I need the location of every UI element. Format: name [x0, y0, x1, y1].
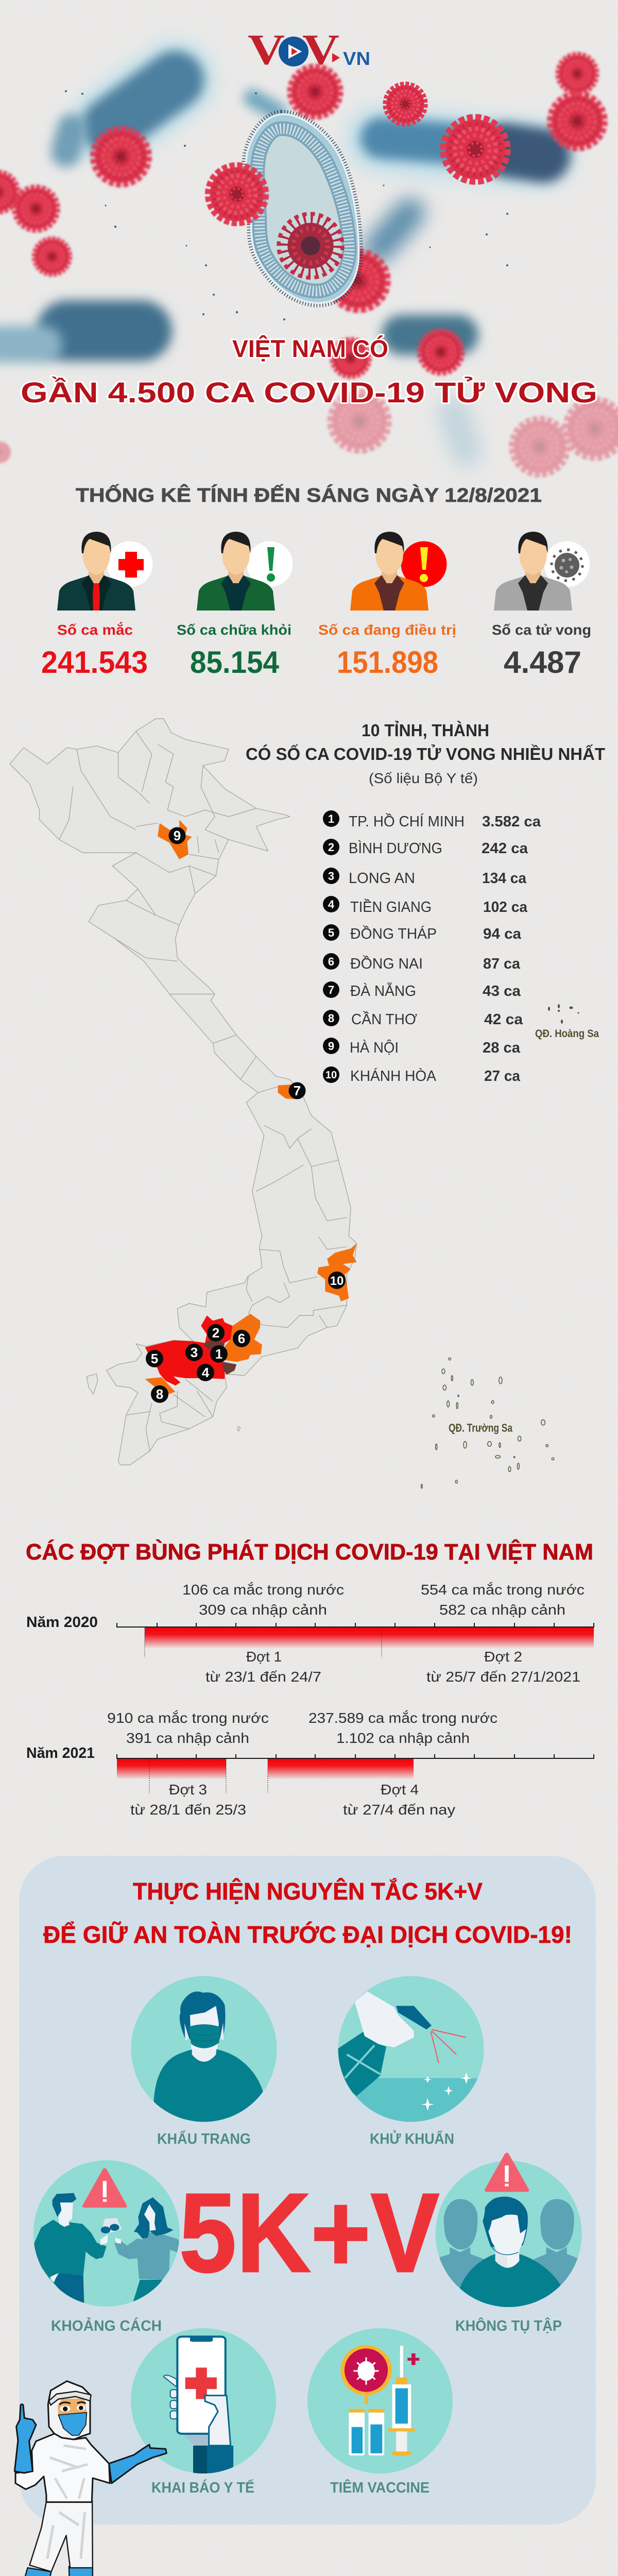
archipelago: Trường Sa [421, 1358, 554, 1488]
row 3: 3 [328, 870, 334, 883]
panel: 5K+V rules [19, 1856, 596, 2524]
row 10 [323, 1066, 521, 1084]
marker numbers: 5 [151, 1351, 158, 1366]
row 1 [323, 810, 541, 830]
virus inside cell [279, 214, 342, 278]
wave 2 text: 554 ca mắc trong nước [421, 1582, 585, 1598]
stat: in treatment: 151.898 [337, 645, 438, 680]
row 6 [323, 953, 521, 972]
row 5: 94 ca [483, 926, 522, 942]
highlighted: Bình Dương [201, 1315, 233, 1343]
row 9: HÀ NỘI [350, 1039, 399, 1056]
row 3: LONG AN [349, 870, 415, 887]
central cell [246, 114, 359, 303]
wave 2 text: Đợt 2 [484, 1649, 522, 1665]
row 1: 1 [328, 812, 334, 825]
stat: deaths: Số ca tử vong [492, 622, 591, 638]
row 5: ĐỒNG THÁP [350, 925, 437, 942]
lower body [14, 2501, 112, 2576]
wave 4 text: 237.589 ca mắc trong nước [308, 1710, 497, 1726]
icon: phone medical declaration [131, 2328, 276, 2474]
timeline 2020 [26, 1582, 594, 1685]
character: medical worker in protective suit [14, 2381, 166, 2576]
wave 1 text: Đợt 1 [246, 1649, 282, 1665]
warning triangle [82, 2168, 127, 2208]
marker numbers: 4 [202, 1365, 210, 1380]
title: VIỆT NAM CÓ [232, 335, 388, 362]
label: khử khuẩn: KHỬ KHUẨN [370, 2130, 454, 2147]
marker numbers: 7 [294, 1083, 301, 1098]
highlighted: Đà Nẵng [278, 1084, 303, 1099]
map north part [10, 719, 351, 1237]
wave 1 text: 106 ca mắc trong nước [182, 1582, 344, 1598]
label: không tụ tập: KHÔNG TỤ TẬP [455, 2317, 562, 2334]
row 9: 9 [328, 1040, 334, 1053]
archipelago: Hoàng Sa: QĐ. Hoàng Sa [535, 1028, 599, 1040]
heading: statistics date: THỐNG KÊ TÍNH ĐẾN SÁNG NGÀY 12/8/2021 [76, 483, 542, 506]
heading: top 10 provinces: (Số liệu Bộ Y tế) [369, 770, 478, 786]
highlighted: Hà Nội [158, 820, 192, 859]
highlighted: Cần Thơ [145, 1377, 176, 1395]
row 5 [323, 924, 522, 942]
wave 1 text: 309 ca nhập cảnh [199, 1602, 327, 1618]
stat: recovered [177, 532, 293, 680]
glasses [101, 2218, 122, 2232]
label: khai báo y tế: KHAI BÁO Y TẾ [151, 2479, 254, 2496]
stat: in treatment [318, 532, 456, 680]
stat: recovered: Số ca chữa khỏi [177, 622, 291, 638]
faded viruses [0, 392, 618, 475]
row 8: CẦN THƠ [351, 1010, 417, 1028]
stat: deaths: 4.487 [504, 645, 581, 680]
wave 4 text: từ 27/4 đến nay [343, 1802, 455, 1818]
timeline 2021 [26, 1710, 594, 1818]
label: khẩu trang: KHẨU TRANG [157, 2130, 251, 2147]
bar: waves 1 and 2 [145, 1627, 594, 1649]
speckles [65, 56, 569, 320]
logo: VOV.VN: V [248, 26, 285, 74]
highlighted: Mekong provinces [145, 1341, 225, 1385]
warning triangle [485, 2153, 529, 2192]
stat: deaths [492, 532, 591, 680]
icon: no gathering [436, 2153, 582, 2309]
heading: top 10 provinces: CÓ SỐ CA COVID-19 TỬ VONG NHIỀU NHẤT [246, 744, 605, 764]
woman [133, 2280, 162, 2302]
icon: disinfection spray [335, 1976, 489, 2126]
list of provinces [323, 810, 541, 1084]
panel heading: ĐỂ GIỮ AN TOÀN TRƯỚC ĐẠI DỊCH COVID-19! [43, 1921, 572, 1948]
row 8: 42 ca [484, 1011, 523, 1028]
stat: total cases [41, 532, 152, 680]
row 4: TIỀN GIANG [350, 898, 432, 916]
stat: in treatment: Số ca đang điều trị [318, 622, 456, 638]
logo: VOV.VN [248, 26, 370, 74]
stat: total cases: Số ca mắc [57, 622, 133, 638]
row 6: ĐỒNG NAI [350, 955, 423, 972]
red viruses, blurred [0, 54, 605, 377]
big 5K+V: 5K+V [179, 2171, 439, 2296]
row 7 [323, 981, 521, 999]
map south part [87, 1236, 357, 1465]
panel heading: THỰC HIỆN NGUYÊN TẮC 5K+V [133, 1878, 483, 1905]
row 7: 7 [328, 984, 334, 996]
archipelago: Hoàng Sa [535, 1004, 599, 1040]
row 10: 10 [325, 1070, 337, 1081]
highlighted: Khánh Hòa [317, 1243, 357, 1301]
title: GẦN 4.500 CA COVID-19 TỬ VONG [21, 376, 597, 409]
row 8 [323, 1010, 523, 1028]
map of Vietnam [10, 719, 357, 1465]
islands: Phú Quốc, Côn Đảo [87, 1374, 241, 1431]
wave 1 text: từ 23/1 đến 24/7 [205, 1669, 321, 1685]
timeline 2020: Năm 2020 [26, 1614, 98, 1631]
background people [439, 2199, 484, 2289]
row 10: KHÁNH HÒA [350, 1067, 437, 1084]
panel heading [43, 1878, 572, 1948]
row 10: 27 ca [484, 1068, 521, 1084]
row 6: 6 [328, 955, 334, 968]
stat: total cases: 241.543 [41, 645, 148, 680]
panel: statistics [41, 532, 591, 680]
marker numbers: 1 [215, 1346, 222, 1362]
row 5: 5 [328, 926, 334, 939]
wave 3 text: 391 ca nhập cảnh [126, 1730, 249, 1746]
row 9 [323, 1038, 521, 1056]
wave 3 text: Đợt 3 [169, 1782, 207, 1798]
logo: VOV.VN: V [302, 26, 339, 74]
marker numbers: 8 [156, 1386, 163, 1402]
row 4: 102 ca [483, 899, 528, 916]
logo: VOV.VN: VN [343, 48, 370, 69]
highlighted: TP. Hồ Chí Minh [203, 1340, 236, 1375]
row 1: 3.582 ca [482, 814, 541, 830]
hero illustration: bacteria and viruses [0, 54, 618, 475]
label: khoảng cách: KHOẢNG CÁCH [51, 2317, 162, 2334]
face [488, 2215, 526, 2257]
wave 3 text [107, 1710, 269, 1818]
row 7: 43 ca [483, 983, 521, 999]
marker numbers: 10 [330, 1274, 344, 1288]
row 7: ĐÀ NẴNG [350, 981, 416, 999]
icon: vaccine [307, 2328, 453, 2473]
heading: top 10 provinces: 10 TỈNH, THÀNH [362, 721, 489, 740]
wave 1 text [182, 1582, 344, 1685]
timeline 2021: Năm 2021 [26, 1745, 95, 1761]
row 3: 134 ca [482, 870, 527, 887]
heading: outbreak waves: CÁC ĐỢT BÙNG PHÁT DỊCH COVID-19 TẠI VIỆT NAM [26, 1539, 593, 1565]
wave 3 text: 910 ca mắc trong nước [107, 1710, 269, 1726]
archipelago: Trường Sa: QĐ. Trường Sa [449, 1421, 513, 1434]
marker numbers: 6 [238, 1331, 245, 1346]
marker numbers: 2 [212, 1325, 219, 1341]
main body [460, 2254, 560, 2309]
upper body [14, 2381, 166, 2502]
heading: top 10 provinces [246, 721, 605, 786]
row 8: 8 [328, 1012, 334, 1025]
icon: distancing [32, 2160, 180, 2307]
hair [483, 2197, 528, 2247]
title [21, 335, 597, 409]
marker numbers: 9 [174, 828, 181, 843]
marker numbers: 3 [191, 1345, 198, 1360]
wave 4 text [308, 1710, 497, 1818]
row 2 [323, 839, 528, 857]
wave 4 text: 1.102 ca nhập cảnh [336, 1730, 470, 1746]
bar: waves 3 and 4 [117, 1758, 414, 1780]
row 2: BÌNH DƯƠNG [349, 840, 442, 857]
marker numbers [151, 828, 344, 1402]
label: tiêm vaccine: TIÊM VACCINE [330, 2479, 430, 2496]
wave 4 text: Đợt 4 [381, 1782, 419, 1798]
blurred blue bacteria [0, 80, 543, 451]
man [53, 2273, 84, 2303]
wave 2 text: 582 ca nhập cảnh [439, 1602, 565, 1618]
highlighted: Đồng Nai [225, 1314, 262, 1362]
row 9: 28 ca [483, 1040, 521, 1056]
row 2: 2 [328, 841, 334, 854]
row 6: 87 ca [483, 956, 521, 972]
stat: recovered: 85.154 [190, 645, 280, 680]
row 4 [323, 896, 528, 916]
wave 3 text: từ 28/1 đến 25/3 [130, 1802, 246, 1818]
row 2: 242 ca [482, 840, 528, 857]
row 1: TP. HỒ CHÍ MINH [349, 812, 465, 830]
wave 2 text [421, 1582, 585, 1685]
sharp and front viruses [208, 83, 508, 224]
icon: mask [131, 1976, 277, 2123]
row 3 [323, 868, 527, 887]
row 4: 4 [328, 898, 335, 911]
wave 2 text: từ 25/7 đến 27/1/2021 [426, 1669, 580, 1685]
map markers [146, 827, 345, 1402]
